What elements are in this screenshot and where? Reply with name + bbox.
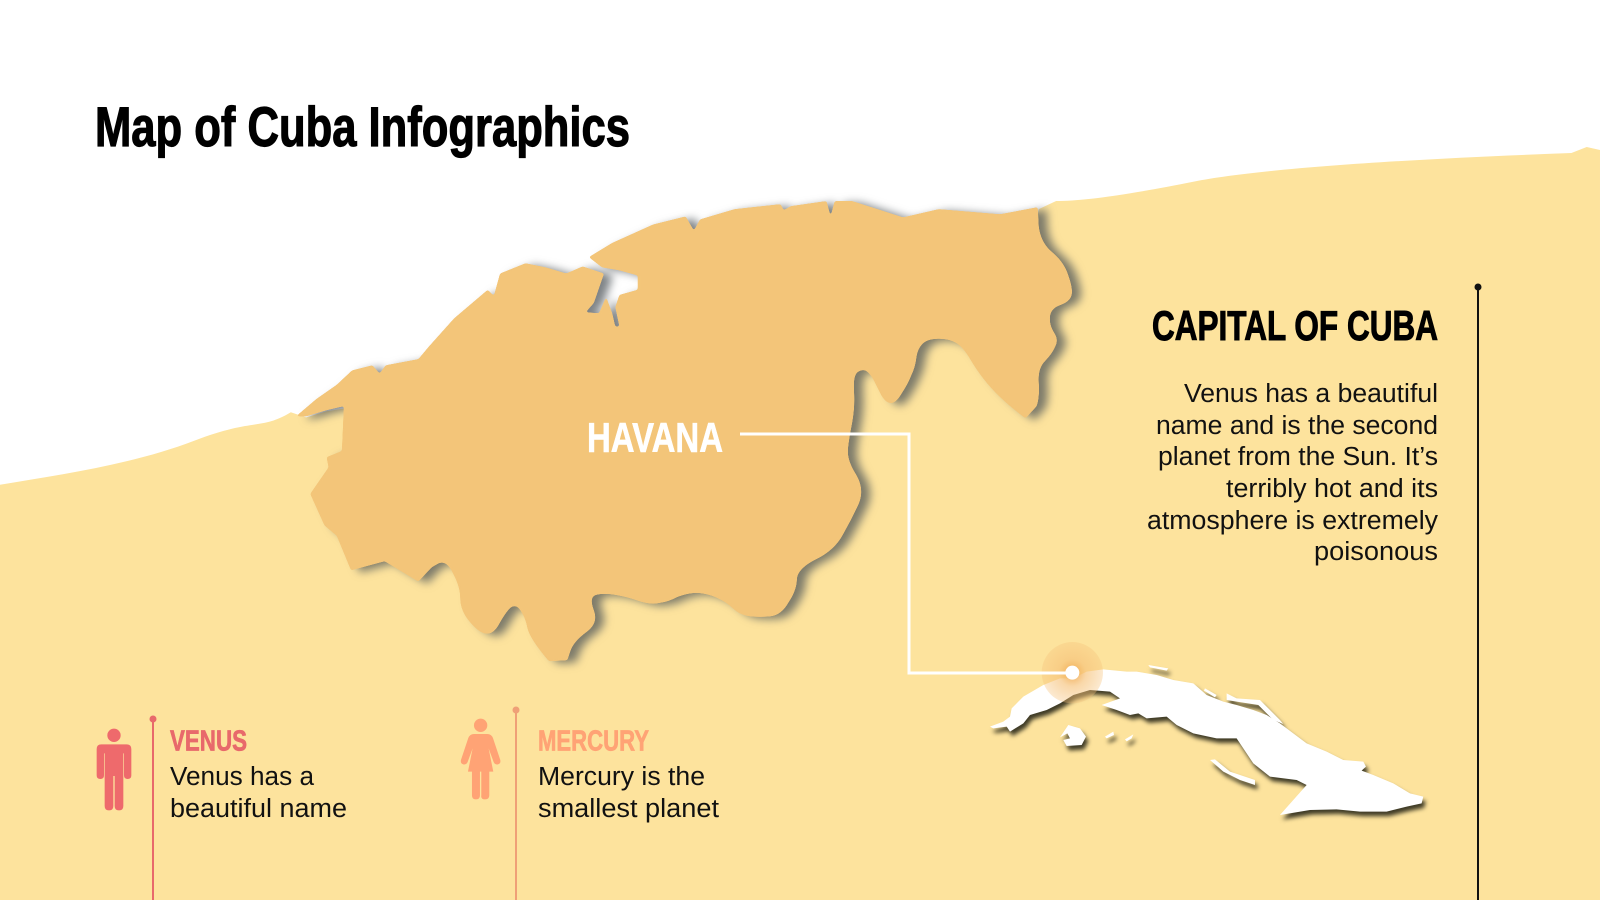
location glow xyxy=(1042,642,1103,703)
connector line: Havana to location xyxy=(740,434,1072,673)
capital description: name and is the second xyxy=(1156,412,1438,440)
heading: capital: CAPITAL OF CUBA xyxy=(1152,302,1438,349)
heading: Mercury: MERCURY xyxy=(538,726,649,758)
Venus description: Venus has a xyxy=(170,763,315,791)
location dot xyxy=(1065,666,1079,680)
panel: Mercury xyxy=(461,706,719,900)
map: enlarged western Cuba xyxy=(296,201,1072,661)
label: HAVANA: HAVANA xyxy=(587,414,723,461)
capital description: terribly hot and its xyxy=(1226,475,1438,503)
panel: capital of Cuba xyxy=(1147,284,1482,900)
Mercury description xyxy=(538,763,719,823)
icon: woman xyxy=(461,719,500,799)
vertical rule with dot xyxy=(150,716,156,900)
vertical rule with dot xyxy=(512,706,520,900)
heading: Venus: VENUS xyxy=(170,726,247,758)
capital description: poisonous xyxy=(1314,538,1438,566)
Venus description: beautiful name xyxy=(170,795,347,823)
vertical rule with dot xyxy=(1474,284,1482,900)
panel: Venus xyxy=(97,716,347,900)
Mercury description: smallest planet xyxy=(538,795,719,823)
Mercury description: Mercury is the xyxy=(538,763,705,791)
capital description: planet from the Sun. It’s xyxy=(1158,443,1438,471)
capital description: atmosphere is extremely xyxy=(1147,507,1438,535)
capital description xyxy=(1147,380,1438,566)
icon: man xyxy=(97,729,131,810)
capital description: Venus has a beautiful xyxy=(1184,380,1438,408)
Venus description xyxy=(170,763,347,823)
small Cuba map with location marker xyxy=(990,642,1423,815)
title: Map of Cuba Infographics xyxy=(95,95,630,158)
